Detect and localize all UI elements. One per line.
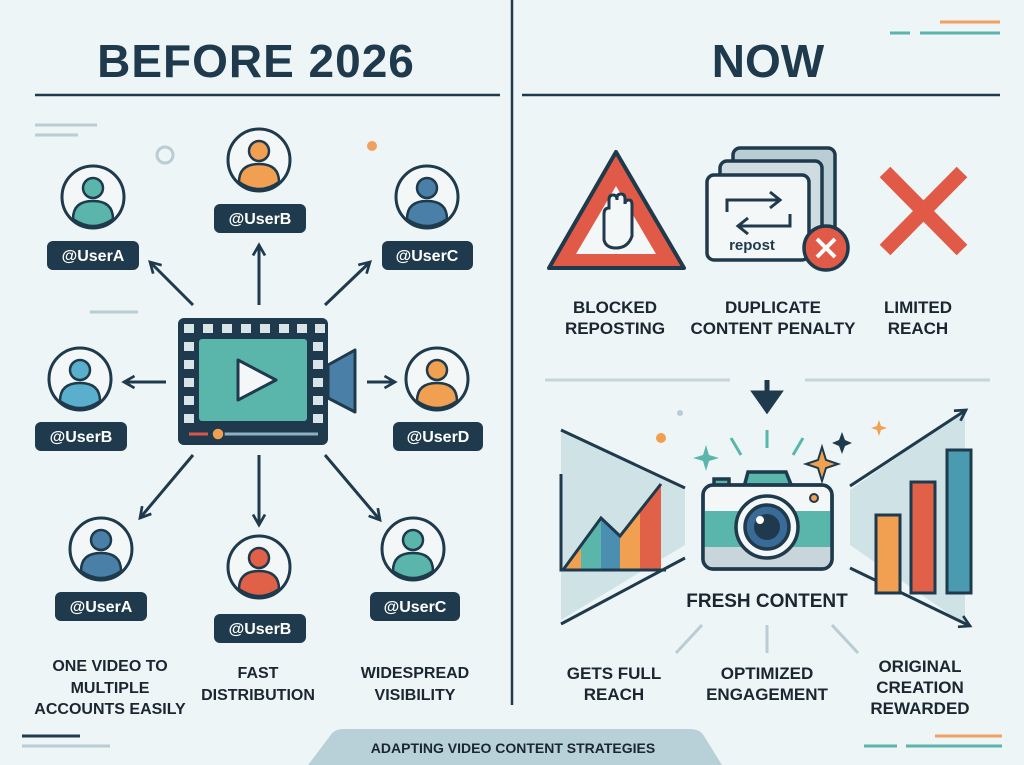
text: fresh content: FRESH CONTENT — [686, 591, 848, 612]
text: now benefits — [567, 657, 970, 718]
text: now problems: REPOSTING — [565, 319, 665, 338]
text: before benefits: VISIBILITY — [375, 687, 456, 704]
panel: fresh content — [561, 410, 971, 653]
users: @UserB — [229, 621, 291, 638]
banner: footer: ADAPTING VIDEO CONTENT STRATEGIES — [371, 740, 655, 756]
users: @UserA — [62, 248, 125, 265]
text: now problems: LIMITED — [884, 298, 952, 317]
users: @UserC — [396, 248, 459, 265]
icon: duplicate repost — [707, 148, 848, 270]
text: now problems: DUPLICATE — [725, 298, 821, 317]
users: @UserB — [50, 429, 112, 446]
icon: blocked warning — [549, 152, 684, 268]
text: before benefits: MULTIPLE — [71, 680, 150, 697]
users: @UserD — [407, 429, 469, 446]
title: now: NOW — [712, 35, 825, 87]
users: @UserB — [229, 211, 291, 228]
text: before benefits: DISTRIBUTION — [201, 687, 315, 704]
users: @UserC — [384, 599, 447, 616]
chart: area — [561, 474, 666, 570]
text: before benefits: FAST — [238, 665, 279, 682]
chart: bars — [876, 450, 971, 593]
text: before benefits: ONE VIDEO TO — [52, 658, 168, 675]
text: now problems: REACH — [888, 319, 948, 338]
text: now benefits: OPTIMIZED — [721, 664, 813, 683]
arrows — [124, 245, 395, 525]
text: now problems: BLOCKED — [573, 298, 657, 317]
text: before benefits — [34, 658, 469, 718]
users: @UserA — [70, 599, 133, 616]
users — [35, 129, 483, 643]
text: now benefits: CREATION — [876, 678, 964, 697]
text: now problems: CONTENT PENALTY — [691, 319, 856, 338]
decorative sparkles — [656, 410, 887, 481]
title: before 2026: BEFORE 2026 — [97, 35, 415, 87]
arrow: down — [755, 380, 779, 410]
text: now benefits: REWARDED — [870, 699, 970, 718]
text: now benefits: ORIGINAL — [878, 657, 962, 676]
panel: before distribution — [35, 129, 483, 643]
text: before benefits: ACCOUNTS EASILY — [34, 701, 186, 718]
text: now benefits: REACH — [584, 685, 644, 704]
text: before benefits: WIDESPREAD — [361, 665, 469, 682]
banner: footer — [308, 729, 722, 765]
text: now benefits: GETS FULL — [567, 664, 661, 683]
text: now benefits: ENGAGEMENT — [706, 685, 829, 704]
icon: duplicate repost: repost — [729, 237, 775, 254]
icon: red x — [885, 172, 962, 250]
text: now problems — [565, 298, 952, 338]
icon: video film — [178, 318, 355, 445]
icon: camera — [703, 472, 832, 569]
